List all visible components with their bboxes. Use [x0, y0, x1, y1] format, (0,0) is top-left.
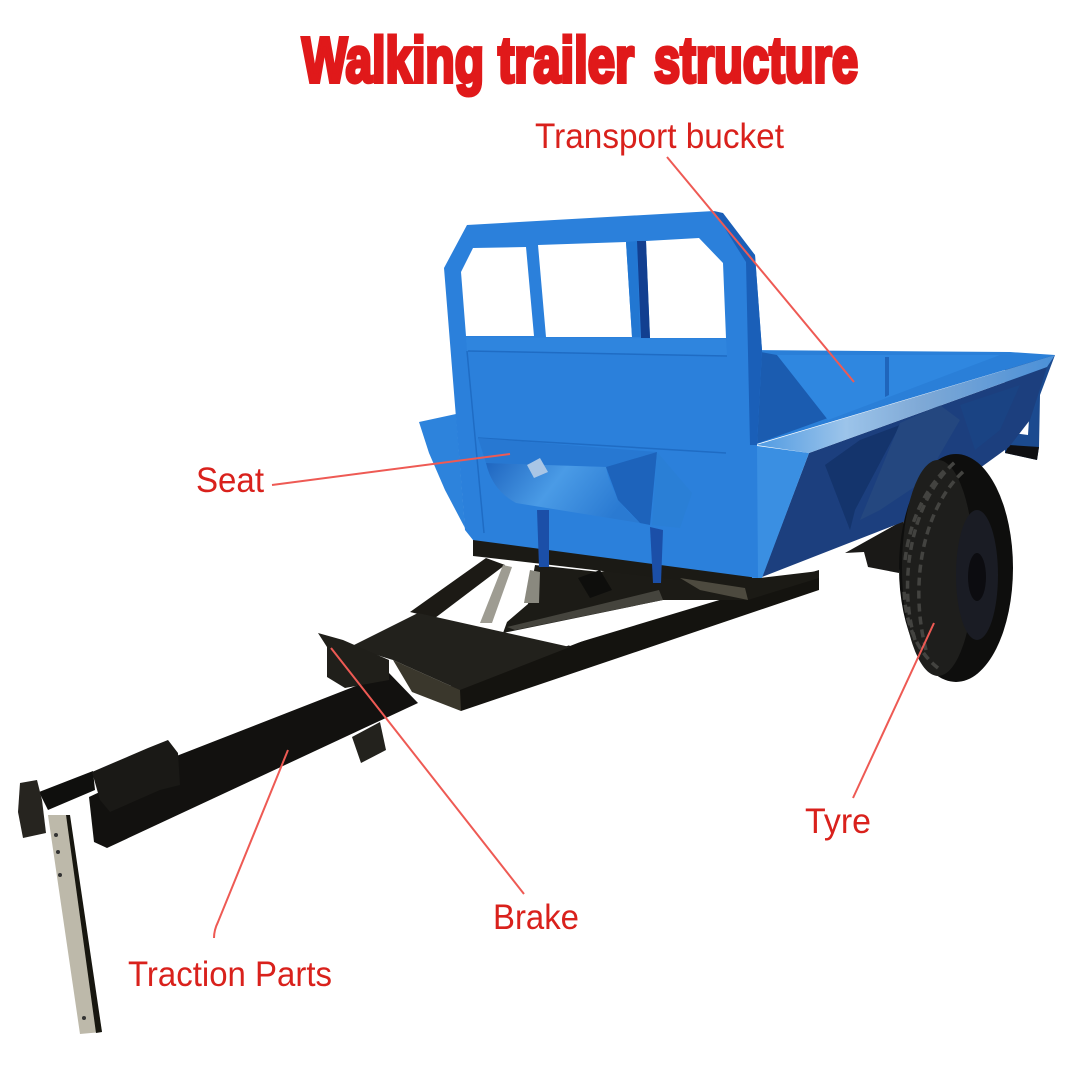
label: traction parts: Traction Parts	[128, 955, 332, 994]
label: seat: Seat	[196, 461, 264, 500]
transport bucket	[419, 350, 1055, 578]
front panel	[444, 211, 762, 583]
label: brake: Brake	[493, 898, 579, 937]
brake	[318, 633, 389, 688]
illustration: trailer	[18, 211, 1055, 1034]
title	[302, 24, 858, 96]
leader lines	[214, 157, 934, 938]
tyre	[899, 454, 1013, 682]
label: tyre: Tyre	[805, 802, 871, 841]
chassis frame	[350, 520, 904, 711]
label: transport bucket: Transport bucket	[535, 117, 784, 156]
title: trailer	[498, 24, 634, 96]
title: structure	[654, 24, 858, 96]
title: Walking	[302, 24, 484, 96]
seat	[478, 438, 692, 583]
drawbar and hitch	[18, 673, 418, 1034]
